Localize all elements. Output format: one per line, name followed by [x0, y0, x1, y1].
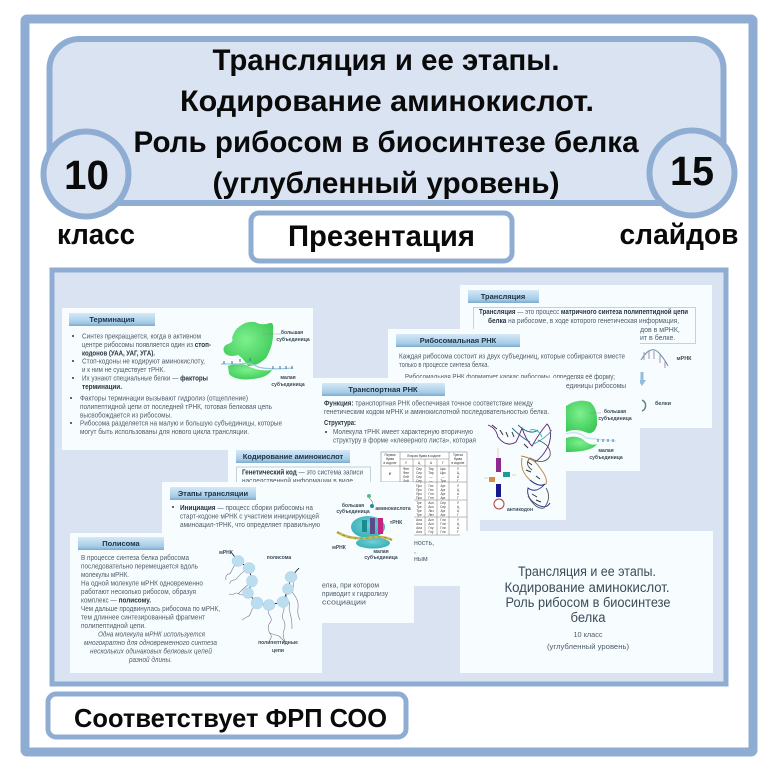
table: genetic code: — [429, 479, 433, 483]
table: genetic code: Асп [428, 518, 434, 522]
table: genetic code: Глу [428, 530, 434, 534]
slide: title slide: Кодирование аминокислот. [504, 580, 670, 595]
slide: Этапы трансляции: елка, при котором [322, 582, 379, 590]
table: genetic code: У [405, 461, 408, 465]
slide: Терминация: Терминация [89, 315, 135, 324]
slide: Терминация [62, 308, 313, 450]
table: genetic code: А [457, 526, 460, 530]
table: genetic code: Фен [403, 467, 409, 471]
slide: title slide: (углубленный уровень) [547, 642, 630, 651]
table: genetic code: Вторая буква в кодоне [407, 454, 441, 458]
icon: ribosome fragment [566, 401, 632, 461]
label: Соответствует ФРП СОО [48, 694, 406, 737]
table: genetic code: — [441, 475, 445, 479]
table: genetic code: Про [416, 492, 422, 496]
slide: Этапы трансляции: приводит к гидролизу [322, 591, 388, 598]
table: genetic code: Тир [428, 467, 434, 471]
table: genetic code: Тре [416, 509, 422, 513]
icon: tRNA structure [484, 424, 552, 513]
table: genetic code: У [389, 471, 392, 476]
table: genetic code: Сер [440, 505, 446, 509]
slide: Полисома: нескольких одинаковых белковых цепей [90, 648, 212, 656]
table: genetic code: Гли [440, 526, 446, 530]
title: Трансляция и ее этапы. [212, 44, 560, 77]
slide: Полисома: разной длины. [128, 656, 172, 664]
icon: green ribosome [221, 322, 310, 388]
slide: Полисома: Полисома [102, 539, 141, 548]
badge: 15 слайдов [620, 130, 738, 251]
slide: Терминация: могут быть использованы для нового цикла трансляции. [80, 428, 249, 436]
slide: Полисома [70, 533, 322, 673]
table: genetic code: Фен [403, 471, 409, 475]
badge: 15 слайдов: слайдов [620, 219, 738, 251]
slide: Трансляция: белка на рибосоме, в ходе которого генетическая информация, [488, 317, 679, 325]
slide: Полисома: На одной молекуле мРНК одновременно [81, 580, 203, 588]
slide: Этапы трансляции: ссоциации [322, 600, 366, 606]
slide: Полисома: последовательно перемещается вдоль [81, 564, 198, 570]
slide: Трансляция: Трансляция — это процесс матричного синтеза полипептидной цепи [479, 308, 688, 316]
table: genetic code: Г [457, 530, 459, 534]
slide: Терминация: Рибосома разделяется на малую и большую субъединицы, которые [80, 420, 282, 428]
icon: polysome: цепи [272, 648, 284, 654]
table: genetic code: Арг [440, 488, 446, 492]
slide: Рибосомальная РНК: единицы рибосомы [566, 382, 626, 390]
table: genetic code: Ц [457, 522, 460, 526]
slide: Рибосомальная РНК: Каждая рибосома состоит из двух субъединиц, которые собираются вместе [399, 352, 625, 360]
slide: Транспортная РНК [313, 378, 566, 520]
table: genetic code: в кодоне [384, 461, 397, 465]
table: genetic code: А [457, 475, 460, 479]
slide: title slide: Роль рибосом в биосинтезе [506, 595, 670, 610]
table: genetic code: Арг [440, 492, 446, 496]
table: genetic code: Про [416, 484, 422, 488]
table: genetic code: Ц [457, 488, 460, 492]
slide: Терминация: Факторы терминации вызывают гидролиз (отщепление) [80, 396, 248, 402]
slide: Терминация: Стоп-кодоны не кодируют аминокислоту, [82, 358, 205, 366]
icon: ribosome fragment: большая [604, 408, 626, 415]
slide: Терминация: полипептидной цепи от последней тРНК, готовая белковая цепь [80, 403, 272, 411]
table: genetic code: У [457, 501, 460, 505]
slide: Трансляция: ит в белке. [640, 334, 675, 342]
slide: title slide [460, 531, 713, 673]
slide: Этапы трансляции: Инициация — процесс сборки рибосомы на [180, 504, 313, 512]
table: genetic code: Лей [403, 479, 409, 483]
title: (углубленный уровень) [212, 167, 560, 200]
label: Соответствует ФРП СОО: Соответствует ФРП СОО [74, 703, 387, 733]
header panel [50, 39, 724, 203]
icon: green ribosome: малая [280, 375, 296, 381]
table: genetic code: Глн [428, 496, 434, 500]
table: genetic code: Ц [418, 461, 421, 465]
slide: title slide: 10 класс [574, 630, 603, 639]
title [134, 44, 639, 200]
table: genetic code: Ц [457, 471, 460, 475]
icon: ribosome fragment: малая [598, 448, 614, 454]
slide: Рибосомальная РНК: Рибосомальная РНК [420, 336, 497, 345]
icon: green ribosome: субъединица [276, 336, 310, 343]
table: genetic code: Ала [416, 526, 422, 530]
slide: Этапы трансляции: Этапы трансляции [178, 489, 249, 498]
slide: Полисома: многократно для одновременного синтеза [84, 639, 217, 647]
table: genetic code: Гис [429, 488, 434, 492]
table: genetic code [381, 452, 467, 535]
table: genetic code: У [457, 518, 460, 522]
table: genetic code: Арг [440, 496, 446, 500]
slide: Трансляция [460, 285, 712, 428]
table: genetic code: Про [416, 488, 422, 492]
slide: Трансляция: Трансляция [481, 292, 525, 301]
table: genetic code: Сер [416, 475, 422, 479]
table: genetic code: Лиз [428, 509, 434, 513]
table: genetic code: У [457, 484, 460, 488]
slide: Полисома: полипептидной цепи. [81, 622, 146, 630]
slide: Трансляция: дов в мРНК, [640, 327, 680, 334]
table: genetic code: Тир [428, 471, 434, 475]
slide: Терминация: кодонов (УАА, УАГ, УГА). [82, 350, 155, 358]
icon: ribosome fragment: субъединица [598, 415, 632, 422]
slide: Кодирование аминокислот: Генетический код — это система записи [242, 468, 363, 476]
table: genetic code: Гли [440, 518, 446, 522]
table: genetic code: Три [440, 479, 446, 483]
table: genetic code: Про [416, 496, 422, 500]
table: genetic code: Глн [428, 492, 434, 496]
table: genetic code: Асп [428, 522, 434, 526]
table: genetic code: Первая [384, 453, 396, 457]
slide: Рибосомальная РНК: только в процессе синтеза белка. [399, 361, 489, 369]
table: genetic code: Сер [416, 471, 422, 475]
icon: ribosome fragment: субъединица [589, 454, 623, 461]
slide: Этапы трансляции: аминоацил-тРНК, что определяет правильную [180, 522, 320, 529]
table: genetic code: А [457, 509, 460, 513]
table: genetic code: Гли [440, 530, 446, 534]
icon: mRNA to protein: мРНК [676, 356, 692, 362]
slide: Транспортная РНК: Функция: транспортная РНК обеспечивая точное соответствие между [324, 400, 533, 408]
table: genetic code: Гис [429, 484, 434, 488]
table: genetic code: Г [457, 496, 459, 500]
slide: Терминация: и к ним не существует тРНК. [82, 367, 165, 374]
table: genetic code: А [457, 492, 460, 496]
panel: slide collage [52, 270, 726, 684]
slide: Рибосомальная РНК: Рибосомальная РНК формирует каркас рибосомы, определяя её форму; [405, 373, 615, 381]
table: genetic code: Арг [440, 513, 446, 517]
icon: teal ribosome: малая [373, 549, 389, 555]
slide: Терминация: терминации. [82, 384, 122, 391]
table: genetic code: Асн [428, 501, 434, 505]
slide: Полисома: тем длиннее синтезированный фрагмент [81, 614, 206, 622]
icon: teal ribosome: мРНК [332, 545, 347, 551]
slide: title slide: Трансляция и ее этапы. [518, 564, 656, 579]
slide: Терминация: Синтез прекращается, когда в активном [82, 334, 201, 340]
title: Роль рибосом в биосинтезе белка [134, 126, 639, 159]
slide: Терминация: центре рибосомы появляется один из стоп- [82, 341, 212, 349]
slide: Рибосомальная РНК [388, 329, 640, 471]
table: genetic code: Сер [440, 501, 446, 505]
table: genetic code: Ала [416, 522, 422, 526]
slide: Кодирование аминокислот: ным [414, 556, 428, 563]
slide: Кодирование аминокислот: Кодирование аминокислот [243, 452, 344, 461]
table: genetic code: У [457, 467, 460, 471]
icon: teal ribosome: большая [342, 502, 364, 509]
slide: Транспортная РНК: структуру в форме «клеверного листа», которая [333, 438, 476, 444]
icon: mRNA to protein: белки [655, 400, 671, 407]
icon: teal ribosome: тРНК [390, 520, 403, 526]
table: genetic code: Ала [416, 530, 422, 534]
slide: Этапы трансляции [162, 482, 414, 623]
table: genetic code: Сер [416, 467, 422, 471]
slide: Полисома: Чем дальше продвинулась рибосома по мРНК, [81, 605, 220, 613]
table: genetic code: Цис [440, 467, 446, 471]
label: Презентация: Презентация [288, 220, 475, 253]
slide: Транспортная РНК: Транспортная РНК [348, 385, 418, 394]
table: genetic code: Лиз [428, 513, 434, 517]
slide: Кодирование аминокислот: ность, [414, 540, 434, 547]
table: genetic code: Арг [440, 484, 446, 488]
icon: green ribosome: субъединица [271, 381, 305, 388]
icon: polysome: полисома [267, 555, 291, 561]
table: genetic code: буква [454, 457, 462, 461]
table: genetic code: Арг [440, 509, 446, 513]
slide: Полисома: работают несколько рибосом, образуя [81, 588, 196, 596]
table: genetic code: Г [457, 479, 459, 483]
slide: Терминация: Их узнают специальные белки — факторы [82, 374, 208, 382]
table: genetic code: Г [457, 513, 459, 517]
slide: Кодирование аминокислот: наследственной информации в виде [242, 477, 353, 485]
table: genetic code: Гли [440, 522, 446, 526]
icon: green ribosome: большая [281, 329, 303, 336]
icon: teal ribosome: аминокислота [375, 506, 411, 512]
slide: Полисома: В процессе синтеза белка рибосома [81, 554, 189, 562]
label: Презентация [251, 213, 512, 261]
table: genetic code: А [430, 461, 433, 465]
icon: teal ribosome: субъединица [364, 554, 398, 561]
table: genetic code: Лей [403, 475, 409, 479]
table: genetic code: в кодоне [452, 461, 465, 465]
table: genetic code: Тре [416, 505, 422, 509]
slide: title slide: белка [570, 610, 606, 625]
table: genetic code: Цис [440, 471, 446, 475]
table: genetic code: Тре [416, 513, 422, 517]
table: genetic code: Третья [453, 453, 463, 457]
slide: Транспортная РНК: Молекула тРНК имеет характерную вторичную [333, 429, 473, 436]
badge: 10 класс: класс [57, 219, 135, 251]
icon: polysome [219, 550, 300, 654]
badge: 15 слайдов: 15 [670, 148, 714, 194]
slide: Полисома: Одна молекула мРНК используется [98, 630, 205, 638]
slide: Полисома: молекулы мРНК. [81, 572, 129, 579]
title: Кодирование аминокислот. [180, 85, 594, 118]
icon: mRNA to protein [638, 350, 692, 411]
table: genetic code: Ц [457, 505, 460, 509]
table: genetic code: — [429, 475, 433, 479]
icon: teal ribosome [332, 494, 411, 561]
icon: tRNA structure: антикодон [507, 507, 533, 513]
icon: teal ribosome: субъединица [336, 508, 370, 515]
slide: Терминация: высвобождается из рибосомы. [80, 412, 172, 420]
table: genetic code: буква [386, 457, 394, 461]
slide: Кодирование аминокислот [228, 449, 480, 586]
icon: polysome: полипептидные [258, 640, 298, 646]
slide: Полисома: комплекс — полисому. [81, 598, 151, 604]
slide: Транспортная РНК: генетическим кодом мРНК и аминокислотной последовательностью белка. [324, 408, 549, 416]
slide: Этапы трансляции: старт-кодоне мРНК с участием инициирующей [180, 512, 319, 520]
slide: Транспортная РНК: Структура: [324, 420, 356, 427]
table: genetic code: Глу [428, 526, 434, 530]
badge: 10 класс: 10 [64, 152, 109, 198]
badge: 10 класс [44, 132, 135, 251]
slide: Кодирование аминокислот: , [414, 548, 416, 555]
icon: polysome: мРНК [219, 550, 234, 556]
table: genetic code: Сер [416, 479, 422, 483]
table: genetic code: Асн [428, 505, 434, 509]
table: genetic code: Г [442, 461, 444, 465]
table: genetic code: Ала [416, 518, 422, 522]
table: genetic code: Тре [416, 501, 422, 505]
